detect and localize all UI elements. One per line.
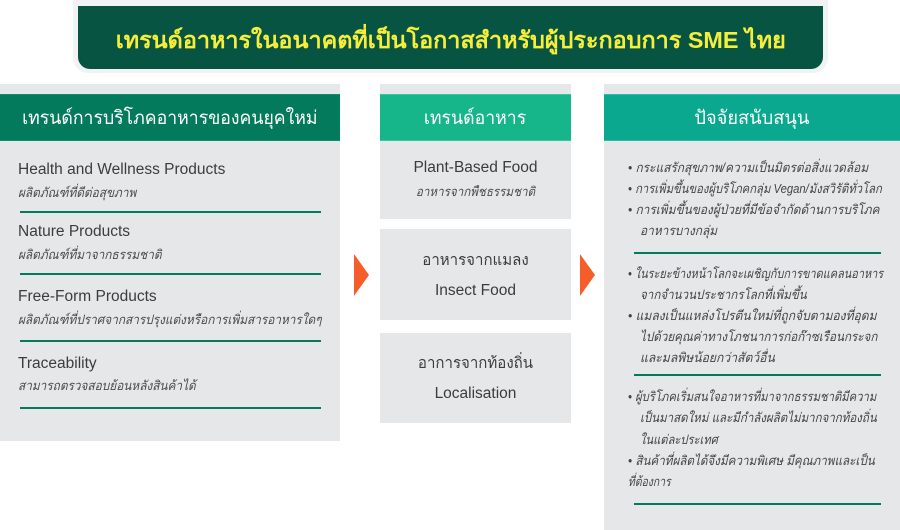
heading: supporting factors: ปัจจัยสนับสนุน: [695, 108, 809, 129]
bullets: insect food factors: • ในระยะข้างหน้าโลกจะเผชิญกับการขาดแคลนอาหาร: [628, 266, 883, 281]
caption: nature products: ผลิตภัณฑ์ที่มาจากธรรมชาติ: [18, 247, 162, 262]
bullets: insect food factors: [628, 266, 884, 365]
item: localisation english: Localisation: [435, 385, 516, 402]
title banner: [73, 0, 828, 73]
heading: supporting factors: [604, 94, 900, 141]
heading: consumer trends: [0, 94, 340, 141]
bullets: localisation factors: เป็นมาสดใหม่ และมีกำลังผลิตไม่มากจากท้องถิ่น: [640, 410, 877, 425]
caption: health and wellness: ผลิตภัณฑ์ที่ดีต่อสุขภาพ: [18, 185, 136, 200]
bullets: insect food factors: และมลพิษน้อยกว่าสัตว์อื่น: [640, 350, 775, 365]
item: nature products: Nature Products: [18, 223, 130, 240]
item: plant-based food: Plant-Based Food: [413, 159, 538, 176]
bullets: localisation factors: • สินค้าที่ผลิตได้จึงมีความพิเศษ มีคุณภาพและเป็น: [628, 453, 875, 468]
caption: traceability: สามารถตรวจสอบย้อนหลังสินค้าได้: [18, 378, 196, 393]
item: traceability: Traceability: [18, 355, 97, 372]
item: health and wellness: Health and Wellness Products: [18, 161, 225, 178]
bullets: insect food factors: จากจำนวนประชากรโลกที่เพิ่มขึ้น: [640, 287, 807, 302]
bullets: plant-based factors: [628, 158, 882, 238]
bullets: plant-based factors: • การเพิ่มขึ้นของผู้บริโภคกลุ่ม Vegan/มังสวิรัติทั่วโลก: [628, 181, 882, 196]
panel: insect food: [380, 229, 571, 320]
bullets: plant-based factors: อาหารบางกลุ่ม: [640, 223, 717, 238]
caption: plant-based food: อาหารจากพืชธรรมชาติ: [416, 184, 535, 199]
heading: consumer trends: เทรนด์การบริโภคอาหารของคนยุคใหม่: [22, 108, 318, 129]
panel: localisation: [380, 333, 571, 423]
arrow: middle to right: [580, 254, 595, 296]
bullets: localisation factors: ที่ต้องการ: [628, 474, 671, 489]
item: local food thai: อาการจากท้องถิ่น: [418, 355, 533, 372]
panel: food trends, plant-based: [380, 84, 571, 219]
bullets: insect food factors: ไปด้วยคุณค่าทางโภชนาการก่อก๊าซเรือนกระจก: [640, 329, 877, 344]
bullets: localisation factors: [628, 388, 877, 489]
item: free-form products: Free-Form Products: [18, 288, 157, 305]
bullets: localisation factors: • ผู้บริโภคเริ่มสนใจอาหารที่มาจากธรรมชาติมีความ: [628, 389, 876, 404]
arrow: left to middle: [354, 254, 369, 296]
caption: free-form products: ผลิตภัณฑ์ที่ปราศจากสารปรุงแต่งหรือการเพิ่มสารอาหารใดๆ: [18, 312, 322, 327]
item: insect food english: Insect Food: [435, 282, 516, 299]
title banner: เทรนด์อาหารในอนาคตที่เป็นโอกาสสำหรับผู้ประกอบการ SME ไทย: [115, 27, 786, 53]
heading: food trends: [380, 94, 571, 141]
panel: consumer trends: [0, 84, 340, 441]
bullets: insect food factors: • แมลงเป็นแหล่งโปรตีนใหม่ที่ถูกจับตามองที่อุดม: [628, 308, 877, 323]
bullets: localisation factors: ในแต่ละประเทศ: [640, 432, 718, 447]
heading: food trends: เทรนด์อาหาร: [424, 108, 527, 129]
item: insect food thai: อาหารจากแมลง: [422, 252, 529, 269]
bullets: plant-based factors: • การเพิ่มขึ้นของผู้ป่วยที่มีข้อจำกัดด้านการบริโภค: [628, 202, 879, 217]
bullets: plant-based factors: • กระแสรักสุขภาพ/ความเป็นมิตรต่อสิ่งแวดล้อม: [628, 160, 868, 175]
panel: supporting factors: [604, 84, 900, 530]
